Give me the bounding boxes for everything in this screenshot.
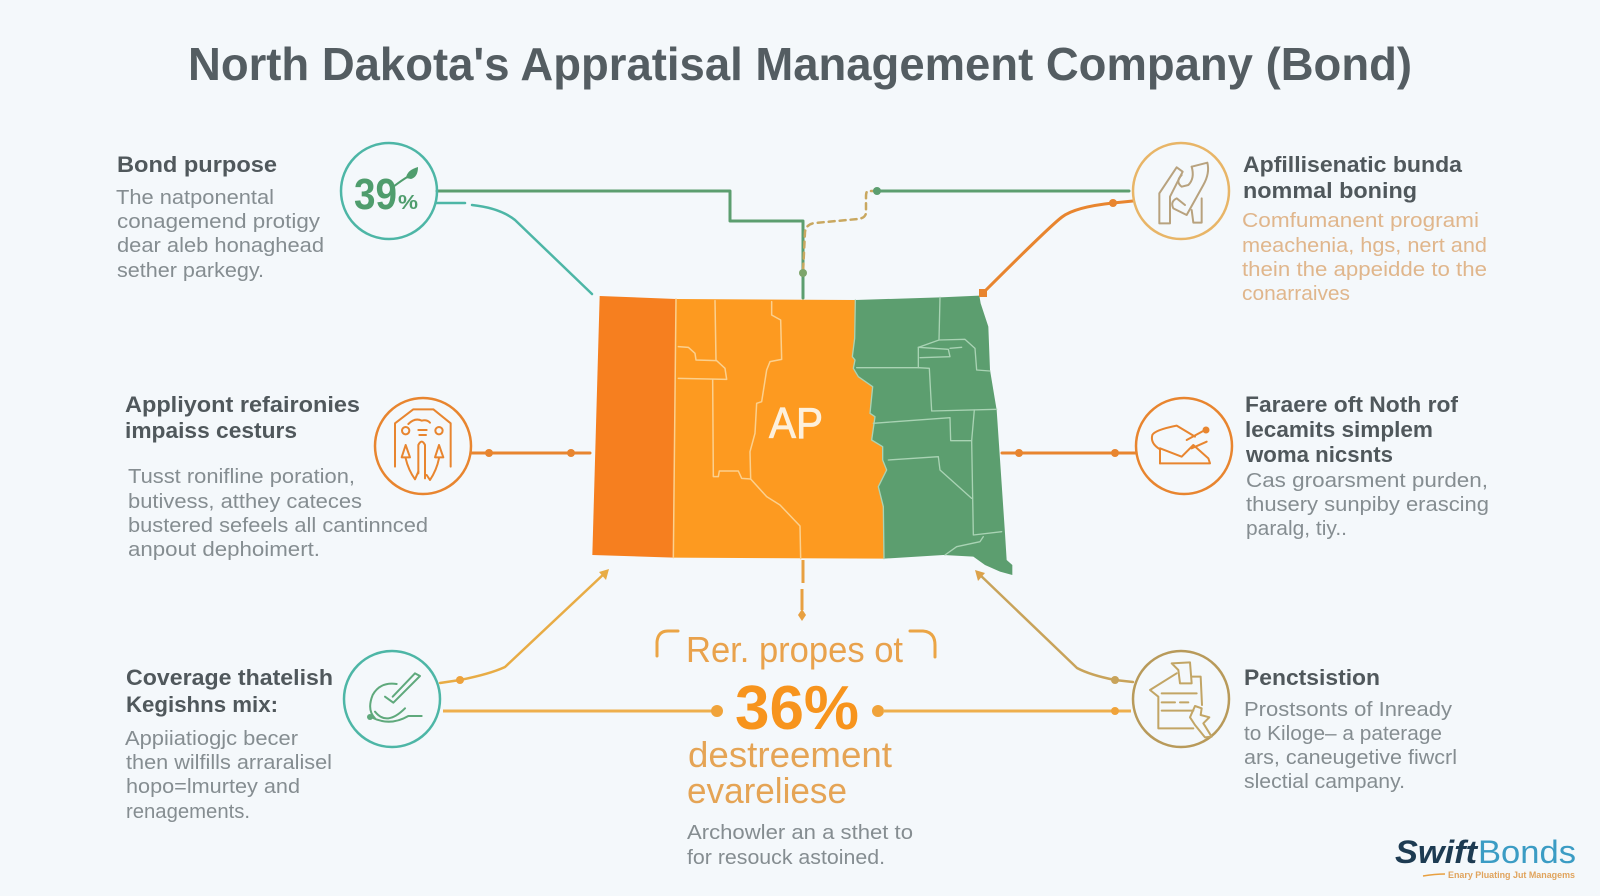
map: North Dakota regions bbox=[592, 296, 1012, 575]
body text: conagemend protigy bbox=[117, 211, 320, 233]
arrow: bottom left to map bbox=[440, 569, 609, 684]
body text: renagements. bbox=[126, 801, 250, 823]
callout heading: Rer. propes ot bbox=[686, 629, 903, 670]
body text: then wilfills arraralisel bbox=[126, 752, 332, 774]
callout subheading: destreement bbox=[688, 734, 892, 775]
region: central orange bbox=[673, 299, 887, 559]
body text: conarraives bbox=[1242, 283, 1350, 305]
panel: coverage bbox=[125, 651, 440, 823]
panel: bottom right bbox=[1133, 651, 1457, 793]
heading bbox=[1245, 392, 1459, 467]
panel: top right bbox=[1133, 143, 1487, 305]
body text: sether parkegy. bbox=[117, 260, 264, 282]
heading: Kegishns mix: bbox=[126, 692, 278, 717]
body text: Cas groarsment purden, bbox=[1246, 470, 1488, 492]
icon: document with seal bbox=[1133, 651, 1229, 747]
logo: SwiftBonds: Enary Pluating Jut Managems bbox=[1448, 870, 1575, 880]
panel: middle right bbox=[1136, 392, 1489, 540]
callout note: Archowler an a sthet to bbox=[687, 822, 913, 844]
callout subheading: evareliese bbox=[687, 770, 847, 811]
body text bbox=[128, 466, 428, 561]
panel: bond purpose bbox=[116, 143, 437, 282]
logo: SwiftBonds bbox=[1395, 834, 1576, 880]
logo: SwiftBonds: Bonds bbox=[1478, 834, 1576, 870]
region: east green bbox=[852, 296, 1012, 575]
connector: top right dashed bbox=[799, 187, 1129, 277]
body text bbox=[1246, 470, 1489, 540]
body text bbox=[1242, 210, 1487, 305]
heading: woma nicsnts bbox=[1245, 442, 1393, 467]
body text: The natponental bbox=[116, 187, 274, 209]
connector: middle right bbox=[1002, 449, 1135, 457]
connector: top right to map (orange) bbox=[979, 199, 1133, 297]
connector: map to callout bbox=[798, 560, 806, 621]
heading: Appliyont refaironies bbox=[125, 392, 360, 417]
connector: purpose to map (green elbow) bbox=[437, 191, 803, 298]
callout note bbox=[687, 822, 913, 869]
heading: lecamits simplem bbox=[1245, 417, 1433, 442]
heading: Bond purpose bbox=[117, 152, 277, 177]
body text: to Kiloge– a paterage bbox=[1244, 723, 1442, 745]
callout subheading bbox=[687, 734, 892, 811]
heading: Apfillisenatic bunda bbox=[1243, 152, 1463, 177]
title: North Dakota's Appratisal Management Company (Bond) bbox=[188, 38, 1412, 90]
body text: Comfumanent programi bbox=[1242, 210, 1479, 232]
map label: AP bbox=[769, 399, 823, 448]
body text: butivess, atthey cateces bbox=[128, 491, 362, 513]
heading: Penctsistion bbox=[1244, 665, 1380, 690]
icon: clasped hands bbox=[1133, 143, 1229, 239]
heading bbox=[125, 392, 360, 443]
body text: slectial campany. bbox=[1244, 771, 1405, 793]
panel: applicant bbox=[125, 392, 471, 561]
body text: dear aleb honaghead bbox=[117, 235, 324, 257]
body text bbox=[1244, 699, 1457, 793]
callout brackets bbox=[657, 631, 935, 657]
county lines: green area bbox=[852, 297, 1002, 559]
callout: center statistic bbox=[657, 629, 935, 869]
heading bbox=[1243, 152, 1463, 203]
connector: purpose to map (teal) bbox=[437, 203, 592, 294]
connector: bottom horizontal line with dots bbox=[443, 705, 1131, 717]
body text: thein the appeidde to the bbox=[1242, 259, 1487, 281]
heading: impaiss cesturs bbox=[125, 418, 297, 443]
body text: meachenia, hgs, nert and bbox=[1242, 235, 1487, 257]
body text: anpout dephoimert. bbox=[128, 539, 320, 561]
heading: Coverage thatelish bbox=[126, 665, 333, 690]
body text bbox=[116, 187, 324, 282]
heading: Faraere oft Noth rof bbox=[1245, 392, 1459, 417]
body text: ars, caneugetive fiwcrl bbox=[1244, 747, 1457, 769]
heading: nommal boning bbox=[1243, 178, 1417, 203]
body text: Appiiatiogjc becer bbox=[125, 728, 298, 750]
body text: bustered sefeels all cantinnced bbox=[128, 515, 428, 537]
body text: hopo=lmurtey and bbox=[126, 776, 300, 798]
callout number: 36% bbox=[735, 674, 859, 743]
icon: percent with leaf bbox=[341, 143, 437, 239]
icon: percent with leaf: % bbox=[398, 192, 418, 214]
icon: graduation hand bbox=[1136, 398, 1232, 494]
arrow: bottom right to map bbox=[975, 570, 1133, 684]
body text bbox=[125, 728, 332, 823]
county lines: orange area bbox=[673, 299, 801, 559]
body text: Prostsonts of Inready bbox=[1244, 699, 1452, 721]
callout note: for resouck astoined. bbox=[687, 847, 885, 869]
body text: thusery sunpiby erascing bbox=[1246, 494, 1489, 516]
body text: paralg, tiy.. bbox=[1246, 518, 1347, 540]
icon: bell building bbox=[375, 398, 471, 494]
icon: check and arc bbox=[344, 651, 440, 747]
heading bbox=[126, 665, 333, 717]
body text: Tusst ronifline poration, bbox=[128, 466, 355, 488]
region: west orange bbox=[592, 296, 676, 558]
connector: middle left bbox=[472, 449, 590, 457]
logo: SwiftBonds: Swift bbox=[1395, 834, 1478, 870]
icon: percent with leaf: 39 bbox=[354, 170, 397, 219]
